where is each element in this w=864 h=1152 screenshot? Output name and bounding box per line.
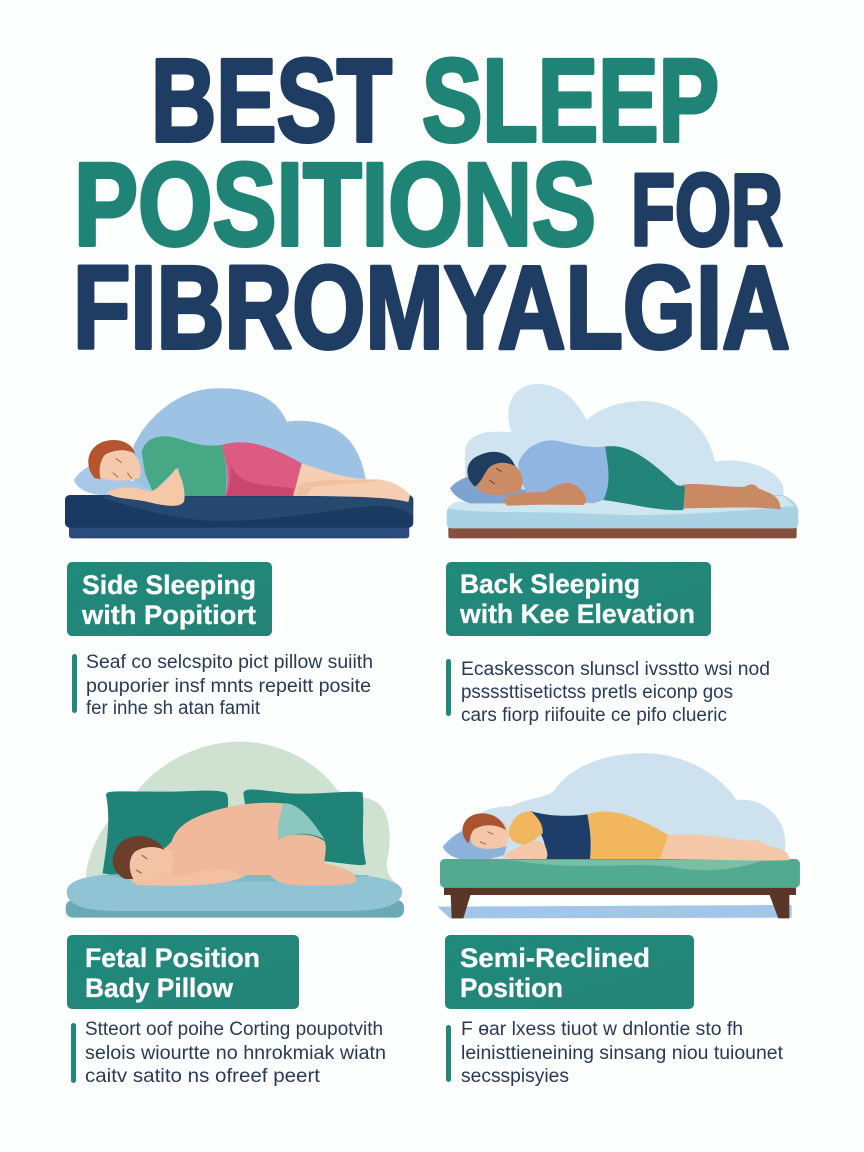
description: back sleeping — [446, 659, 770, 726]
description: back sleeping: cars fiorp riifouite ce pifo clueric — [461, 705, 727, 726]
title: SLEEP — [422, 35, 719, 167]
label: side sleeping: with Popitiort — [81, 600, 256, 630]
label: fetal position: Fetal Position — [85, 943, 260, 973]
description: fetal position: Stteort oof poihe Corting poupotvith — [85, 1019, 383, 1040]
label: fetal position — [67, 935, 299, 1009]
illustration: back sleeper on light mattress — [447, 384, 798, 538]
title — [73, 35, 790, 374]
description: fetal position — [71, 1019, 386, 1087]
description: side sleeping: fer inhe sh atan famit — [86, 698, 261, 719]
description: fetal position: selois wiourtte no hnrokmiak wiatn — [85, 1043, 386, 1064]
description: semi-reclined position: leinisttieneining sinsang niou tuiounet — [461, 1043, 784, 1064]
description: semi-reclined position: F ɵar lxess tiuot w dnlontie sto fh — [461, 1019, 743, 1040]
label: side sleeping — [67, 562, 272, 636]
label: back sleeping — [446, 562, 711, 636]
panel: side sleeping — [65, 388, 413, 719]
description: semi-reclined position: secsspisyies — [461, 1066, 569, 1087]
illustration: fetal sleeper with teal pillows — [66, 742, 404, 918]
label: back sleeping: Back Sleeping — [460, 569, 640, 599]
label: semi-reclined position: Position — [460, 973, 563, 1003]
title: BEST — [151, 35, 392, 167]
description: side sleeping: pouporier insf mnts repeitt posite — [86, 676, 371, 697]
description: fetal position: caitv satito ns ofreef peert — [85, 1066, 321, 1087]
description: back sleeping: pssssttisetictss pretls eiconp gos — [461, 682, 733, 703]
illustration: side sleeper on navy mattress — [65, 388, 413, 538]
title: FOR — [631, 153, 783, 267]
description: back sleeping: Ecaskesscon slunscl ivsstto wsi nod — [461, 659, 770, 680]
description: side sleeping: Seaf co selcspito pict pillow suiith — [86, 652, 373, 673]
description: semi-reclined position — [446, 1019, 784, 1087]
title: POSITIONS — [74, 139, 596, 271]
panel: back sleeping — [446, 384, 798, 726]
label: side sleeping: Side Sleeping — [82, 570, 256, 600]
label: semi-reclined position — [445, 935, 694, 1009]
panel: semi-reclined position — [437, 753, 800, 1087]
label: fetal position: Bady Pillow — [85, 973, 234, 1003]
label: back sleeping: with Kee Elevation — [459, 599, 695, 629]
description: side sleeping — [72, 652, 373, 719]
panel: fetal position — [66, 742, 404, 1087]
illustration: sleeper on green bed with legs — [437, 753, 800, 918]
label: semi-reclined position: Semi-Reclined — [460, 943, 650, 973]
